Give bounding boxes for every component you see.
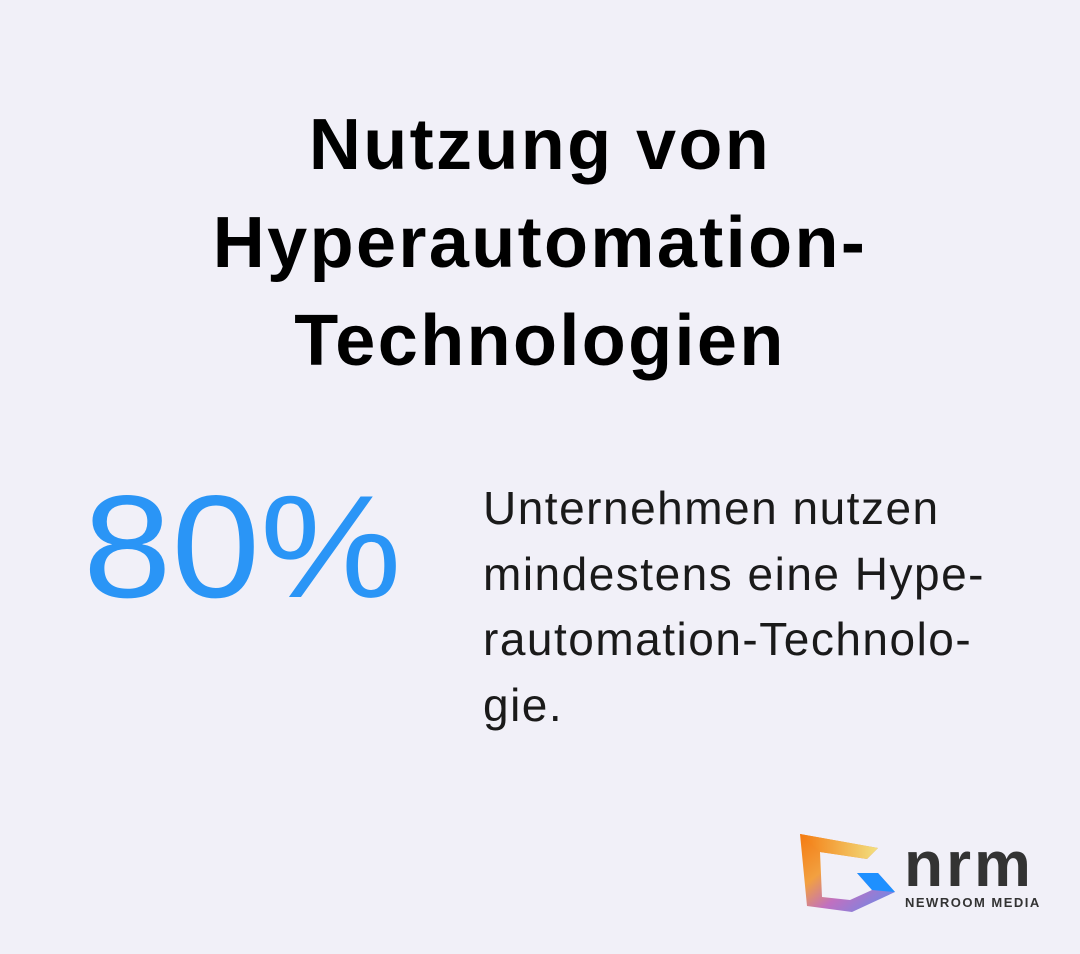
stat: 80%: 80% [83,465,402,628]
title: Hyperautomation- [213,203,867,283]
logo: newroom media [800,828,1041,912]
description text: rautomation-Technolo- [483,613,972,665]
title [213,105,867,381]
description text: mindestens eine Hype- [483,548,985,600]
logo text: NEWROOM MEDIA [905,895,1041,910]
title: Technologien [294,301,786,381]
icon: logo mark [800,834,895,912]
description text [483,482,985,730]
description text: Unternehmen nutzen [483,482,940,534]
description text: gie. [483,678,563,730]
title: Nutzung von [309,105,771,185]
logo text: nrm [904,828,1034,900]
